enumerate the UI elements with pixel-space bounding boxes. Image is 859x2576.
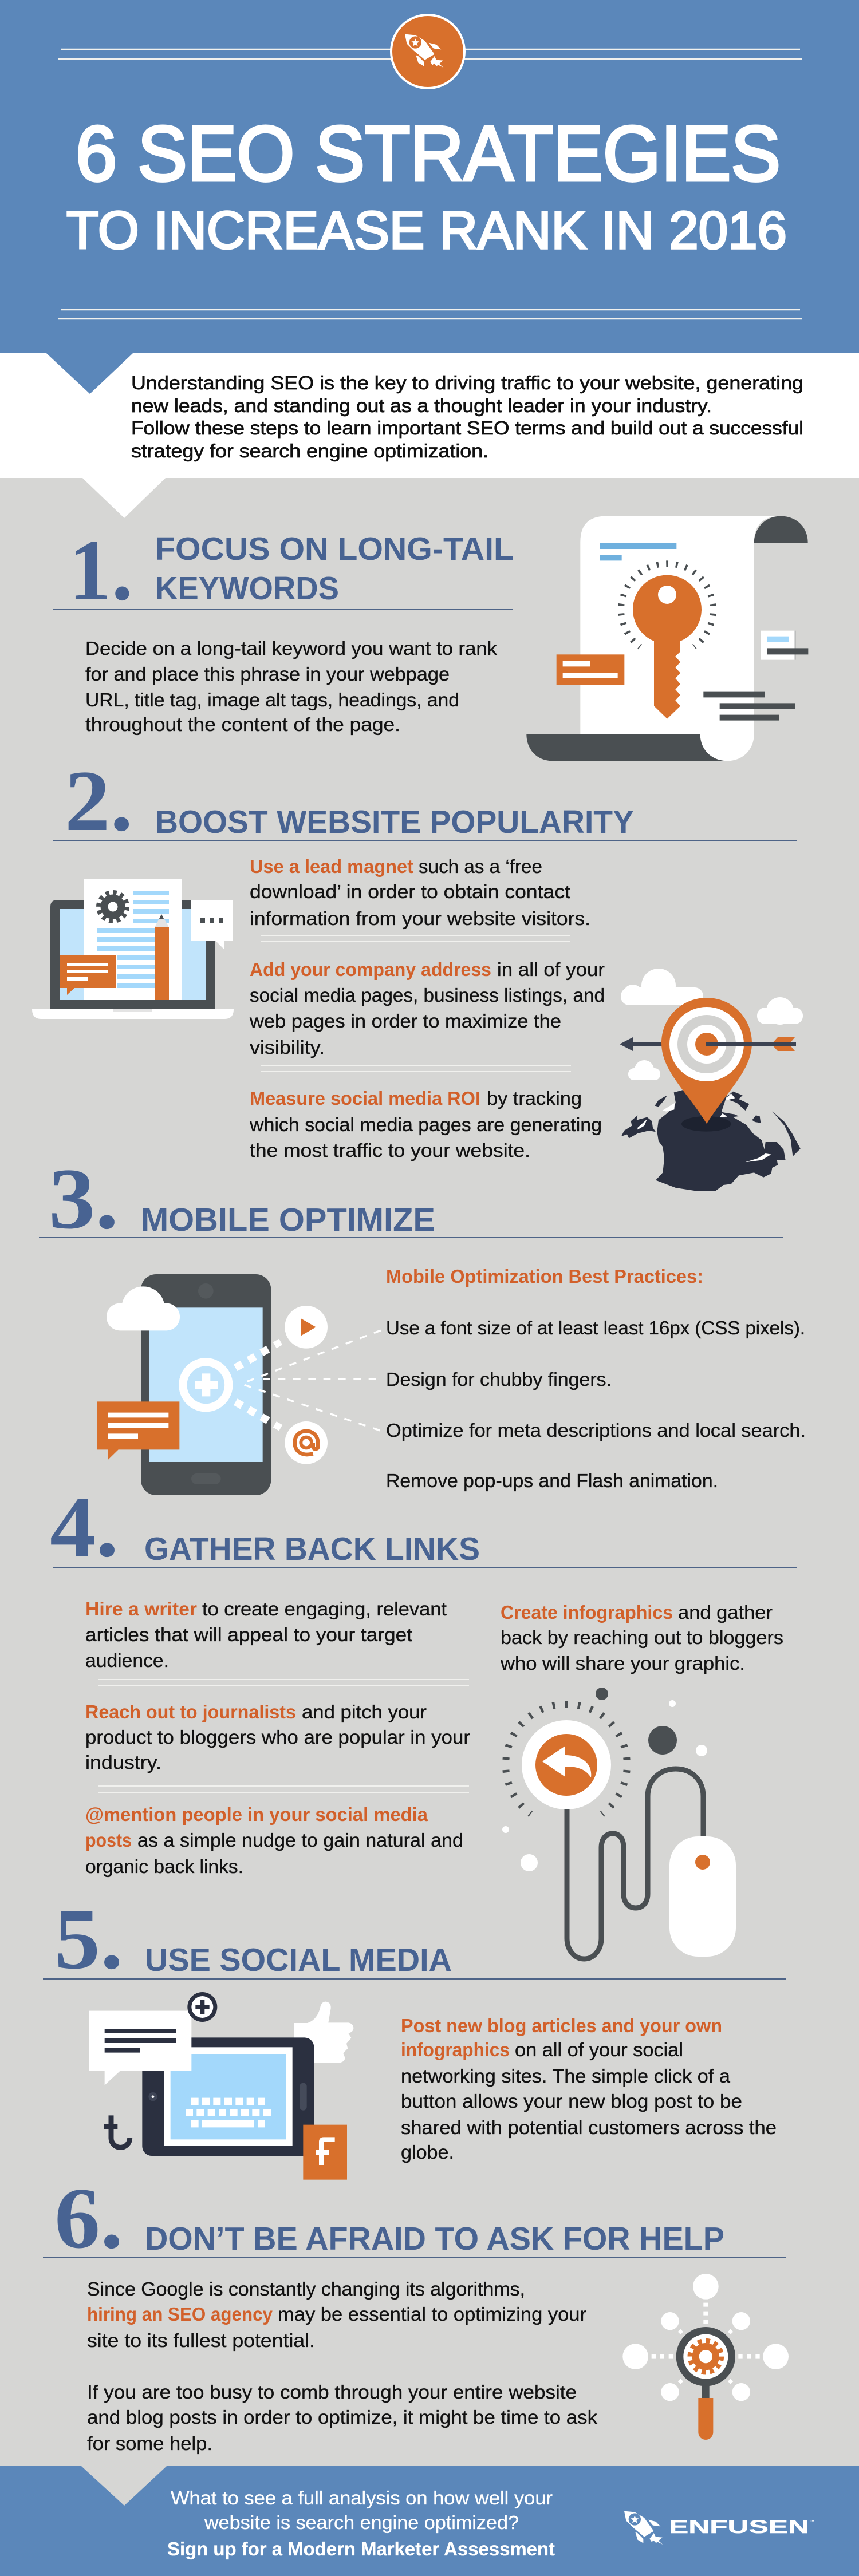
text block: section 6 body: may be essential to optimizing your — [278, 2304, 586, 2325]
text block: mention people — [85, 1804, 463, 1877]
text block: section 5 body: on all of your social — [515, 2039, 683, 2060]
text block: social ROI — [249, 1088, 602, 1161]
text block: lead magnet — [250, 856, 590, 929]
icon: clouds — [621, 969, 803, 1080]
heading: section 3: 3. — [49, 1151, 119, 1247]
text block: lead magnet: download’ in order to obtain contact — [250, 881, 570, 902]
arrow: footer pointer — [81, 2466, 167, 2506]
text block: mention people: as a simple nudge to gain natural and — [137, 1830, 463, 1851]
icon: magnifier with gear — [622, 2274, 789, 2440]
panel: section 3 — [39, 1151, 806, 1495]
text block: footer call to action: website is search engine optimized? — [204, 2512, 519, 2533]
heading: section 4: GATHER BACK LINKS — [144, 1531, 480, 1567]
text block: social ROI: Measure social media ROI — [250, 1088, 480, 1109]
text block: section 1 body: Decide on a long-tail keyword you want to rank — [85, 638, 498, 659]
text block: social ROI: the most traffic to your website. — [250, 1140, 530, 1161]
text block: section 1 body: throughout the content of the page. — [85, 714, 400, 735]
text block: mention people: posts — [85, 1830, 132, 1851]
text block: section 1 body: for and place this phrase in your webpage — [85, 663, 450, 685]
text block: mobile best practices: Design for chubby fingers. — [386, 1369, 612, 1390]
heading: section 1: FOCUS ON LONG-TAIL — [155, 531, 514, 567]
icon: phone illustration — [97, 1274, 382, 1495]
text block: company address: web pages in order to maximize the — [249, 1010, 561, 1032]
panel: section 1 — [53, 516, 808, 761]
text block: hire a writer — [85, 1598, 447, 1671]
heading: section 3 — [39, 1151, 783, 1247]
icon: at sign — [285, 1421, 328, 1464]
text block: section 5 body: networking sites. The simple click of a — [401, 2065, 731, 2087]
icon: rocket badge — [391, 15, 464, 88]
text block: hire a writer: audience. — [85, 1650, 169, 1671]
text block: section 6 body: Since Google is constantly changing its algorithms, — [87, 2278, 525, 2300]
text block: company address: social media pages, business listings, and — [250, 985, 605, 1006]
icon: map pin target — [661, 998, 752, 1124]
text block: create infographics — [500, 1602, 783, 1674]
text block: social ROI: by tracking — [487, 1088, 582, 1109]
title — [66, 110, 787, 260]
text block: section 5 body: globe. — [401, 2142, 454, 2163]
title: 6 SEO STRATEGIES — [76, 110, 781, 197]
text block: reach out to journalists: industry. — [85, 1752, 161, 1773]
text block: section 6 body: If you are too busy to comb through your entire website — [87, 2381, 577, 2403]
heading: section 5: USE SOCIAL MEDIA — [145, 1942, 452, 1978]
text block: intro copy: new leads, and standing out as a thought leader in your industry. — [131, 395, 712, 416]
text block: intro copy: Understanding SEO is the key to driving traffic to your website, generating — [131, 372, 803, 393]
text block: reach out to journalists: product to bloggers who are popular in your — [85, 1726, 470, 1748]
text block: hire a writer: to create engaging, relevant — [202, 1598, 447, 1619]
text block: hire a writer: Hire a writer — [85, 1598, 197, 1619]
text block: mobile best practices: Mobile Optimization Best Practices: — [386, 1266, 703, 1287]
heading: section 2 — [53, 753, 797, 849]
heading: section 1: 1. — [69, 522, 133, 618]
text block: section 6 body: and blog posts in order to optimize, it might be time to ask — [87, 2407, 598, 2428]
text block: mention people: organic back links. — [85, 1856, 243, 1877]
icon: tablet and social — [89, 1992, 353, 2180]
text block: reach out to journalists — [85, 1701, 470, 1773]
panel: intro — [0, 353, 859, 478]
text block: company address: in all of your — [497, 959, 605, 980]
text block: company address: Add your company address — [250, 959, 491, 980]
text block: reach out to journalists: Reach out to journalists — [85, 1701, 296, 1722]
arrow: header pointer — [46, 353, 133, 394]
text block: mobile best practices: Remove pop-ups and Flash animation. — [386, 1470, 718, 1491]
panel: header banner — [0, 0, 859, 353]
panel: section 6 — [43, 2170, 789, 2454]
text block: mobile best practices: Use a font size of at least least 16px (CSS pixels). — [386, 1317, 805, 1338]
text block: intro copy: strategy for search engine optimization. — [131, 440, 488, 461]
heading: section 1: KEYWORDS — [155, 570, 339, 607]
text block: mobile best practices — [386, 1266, 806, 1491]
text block: intro copy: Follow these steps to learn important SEO terms and build out a successful — [131, 417, 803, 438]
text block: section 6 body: hiring an SEO agency — [87, 2304, 273, 2325]
heading: section 6: 6. — [54, 2170, 123, 2266]
icon: key on scroll — [526, 516, 808, 761]
icon: play button — [285, 1306, 328, 1349]
text block: lead magnet: information from your website visitors. — [250, 908, 590, 929]
logo: Enfusen — [624, 2511, 814, 2545]
text block: section 6 body: site to its fullest potential. — [87, 2330, 315, 2351]
panel: section 4 — [50, 1479, 797, 1959]
logo: Enfusen: ™ — [810, 2519, 814, 2524]
panel: section 2 — [32, 753, 803, 1191]
heading: section 2: 2. — [65, 753, 133, 849]
icon: laptop with document — [32, 879, 234, 1019]
arrow: target arrow — [706, 1037, 796, 1051]
text block: footer call to action: What to see a full analysis on how well your — [171, 2487, 553, 2508]
text block: section 1 body: URL, title tag, image alt tags, headings, and — [85, 689, 459, 710]
heading: section 5 — [43, 1891, 786, 1987]
text block: create infographics: back by reaching out to bloggers — [501, 1627, 783, 1648]
text block: section 5 body: infographics — [401, 2039, 510, 2060]
text block: section 5 body: Post new blog articles and your own — [401, 2015, 722, 2036]
arrow: intro pointer — [82, 478, 166, 518]
heading: section 6: DON’T BE AFRAID TO ASK FOR HELP — [145, 2221, 724, 2257]
logo: Enfusen: ENFUSEN — [669, 2516, 809, 2537]
icon: globe — [621, 1089, 801, 1191]
text block: footer call to action — [167, 2487, 555, 2559]
text block: reach out to journalists: and pitch your — [302, 1701, 427, 1722]
text block: lead magnet: Use a lead magnet — [250, 856, 413, 877]
heading: section 3: MOBILE OPTIMIZE — [141, 1202, 435, 1238]
icon: globe with map pin and target — [620, 969, 803, 1191]
heading: section 5: 5. — [54, 1891, 123, 1987]
text block: company address: visibility. — [250, 1037, 325, 1058]
text block: section 5 body — [401, 2015, 777, 2163]
text block: section 5 body: shared with potential customers across the — [401, 2117, 777, 2138]
icon: mouse with back-link button — [502, 1688, 736, 1959]
text block: create infographics: and gather — [678, 1602, 773, 1623]
text block: section 6 body — [87, 2278, 598, 2454]
text block: mention people: @mention people in your social media — [85, 1804, 428, 1825]
text block: create infographics: who will share your graphic. — [500, 1653, 745, 1674]
text block: mobile best practices: Optimize for meta descriptions and local search. — [386, 1420, 806, 1441]
text block: section 1 body — [85, 638, 498, 735]
text block: lead magnet: such as a ‘free — [419, 856, 542, 877]
heading: section 2: BOOST WEBSITE POPULARITY — [155, 804, 634, 840]
text block: footer call to action: Sign up for a Modern Marketer Assessment — [167, 2538, 555, 2559]
title: TO INCREASE RANK IN 2016 — [66, 200, 787, 260]
heading: section 6 — [43, 2170, 786, 2266]
text block: hire a writer: articles that will appeal to your target — [85, 1624, 412, 1645]
text block: intro copy — [131, 372, 803, 461]
text block: section 6 body: for some help. — [87, 2433, 212, 2454]
text block: company address — [249, 959, 605, 1058]
panel: footer — [0, 2466, 859, 2576]
heading: section 1 — [53, 522, 514, 618]
text block: create infographics: Create infographics — [501, 1602, 673, 1623]
heading: section 4 — [50, 1479, 797, 1575]
text block: section 5 body: button allows your new blog post to be — [401, 2091, 742, 2112]
text block: social ROI: which social media pages are generating — [249, 1114, 602, 1135]
panel: section 5 — [43, 1891, 786, 2180]
heading: section 4: 4. — [50, 1479, 119, 1575]
